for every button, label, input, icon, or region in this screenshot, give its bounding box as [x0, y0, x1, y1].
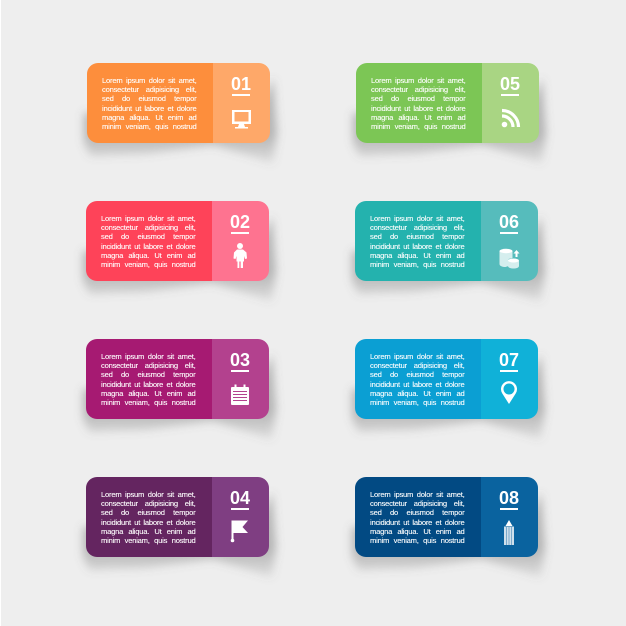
body text: consectetur adipisicing elit,: [101, 223, 196, 232]
body text: consectetur adipisicing elit,: [101, 361, 196, 370]
card 06 teal: [348, 201, 550, 300]
body text: incididunt ut labore et dolore: [370, 380, 464, 389]
card face: [355, 339, 538, 419]
card face: [86, 339, 269, 419]
body text: Lorem ipsum dolor sit amet,: [102, 76, 196, 84]
body text: Lorem ipsum dolor sit amet,: [101, 352, 196, 360]
card 05 green: [348, 63, 550, 162]
card 04 purple: [78, 477, 280, 576]
body text: magna aliqua. Ut enim ad: [101, 251, 196, 260]
body text: sed do eiusmod tempor: [101, 232, 196, 241]
body text: minim veniam, quis nostrud: [101, 398, 196, 407]
icon: map pin: [501, 381, 517, 404]
shadow: [78, 356, 280, 438]
number: 08: [499, 488, 519, 508]
body text: minim veniam, quis nostrud: [370, 536, 464, 545]
body text: Lorem ipsum dolor sit amet,: [370, 490, 464, 498]
icon: person: [234, 243, 247, 268]
body text: sed do eiusmod tempor: [370, 508, 464, 517]
body text: [370, 490, 465, 545]
body text: consectetur adipisicing elit,: [101, 499, 196, 508]
body text: sed do eiusmod tempor: [370, 232, 464, 241]
body text: Lorem ipsum dolor sit amet,: [371, 76, 466, 84]
body text: consectetur adipisicing elit,: [102, 85, 196, 94]
body text: magna aliqua. Ut enim ad: [101, 389, 196, 398]
body text: magna aliqua. Ut enim ad: [371, 113, 466, 122]
body text: minim veniam, quis nostrud: [370, 260, 464, 269]
body text: magna aliqua. Ut enim ad: [370, 389, 464, 398]
body text: [371, 76, 466, 131]
shadow: [348, 218, 550, 300]
shadow: [80, 80, 282, 162]
body text: consectetur adipisicing elit,: [370, 499, 464, 508]
body text: Lorem ipsum dolor sit amet,: [101, 490, 196, 498]
body text: incididunt ut labore et dolore: [371, 104, 466, 113]
body text: magna aliqua. Ut enim ad: [370, 251, 464, 260]
body text: minim veniam, quis nostrud: [101, 260, 196, 269]
body text: Lorem ipsum dolor sit amet,: [101, 214, 196, 222]
number: 03: [230, 350, 250, 370]
shadow: [78, 494, 280, 576]
card face: [355, 477, 538, 557]
icon: flag: [230, 520, 248, 542]
body text: incididunt ut labore et dolore: [370, 518, 464, 527]
number: 05: [500, 74, 520, 94]
card 01 orange: [80, 63, 282, 162]
shadow: [348, 356, 550, 438]
body text: incididunt ut labore et dolore: [101, 242, 196, 251]
shadow: [348, 494, 550, 576]
body text: magna aliqua. Ut enim ad: [370, 527, 464, 536]
body text: Lorem ipsum dolor sit amet,: [370, 352, 464, 360]
body text: sed do eiusmod tempor: [370, 370, 464, 379]
card 08 navy: [348, 477, 550, 576]
number: 01: [231, 74, 251, 94]
card face: [355, 201, 538, 281]
icon: pencil: [504, 520, 514, 545]
body text: minim veniam, quis nostrud: [370, 398, 464, 407]
shadow: [78, 218, 280, 300]
body text: incididunt ut labore et dolore: [101, 380, 196, 389]
card face: [86, 477, 269, 557]
body text: incididunt ut labore et dolore: [370, 242, 464, 251]
card face: [356, 63, 539, 143]
body text: sed do eiusmod tempor: [371, 94, 466, 103]
body text: incididunt ut labore et dolore: [102, 104, 196, 113]
body text: minim veniam, quis nostrud: [101, 536, 196, 545]
number: 06: [499, 212, 519, 232]
body text: sed do eiusmod tempor: [102, 94, 196, 103]
number: 07: [499, 350, 519, 370]
body text: sed do eiusmod tempor: [101, 370, 196, 379]
body text: consectetur adipisicing elit,: [370, 361, 464, 370]
body text: [370, 352, 465, 407]
body text: consectetur adipisicing elit,: [371, 85, 466, 94]
number: 04: [230, 488, 250, 508]
body text: [370, 214, 465, 269]
body text: minim veniam, quis nostrud: [102, 122, 196, 131]
body text: incididunt ut labore et dolore: [101, 518, 196, 527]
card face: [86, 201, 269, 281]
body text: sed do eiusmod tempor: [101, 508, 196, 517]
body text: Lorem ipsum dolor sit amet,: [370, 214, 464, 222]
icon: database: [500, 248, 520, 268]
card 03 magenta: [78, 339, 280, 438]
card 07 blue: [348, 339, 550, 438]
body text: [101, 214, 196, 269]
shadow: [348, 80, 550, 162]
body text: [101, 490, 196, 545]
body text: [101, 352, 196, 407]
body text: [102, 76, 197, 131]
body text: consectetur adipisicing elit,: [370, 223, 464, 232]
icon: monitor: [232, 110, 251, 128]
icon: notepad: [231, 384, 249, 405]
card face: [87, 63, 270, 143]
icon: rss: [502, 108, 520, 128]
body text: magna aliqua. Ut enim ad: [102, 113, 196, 122]
body text: minim veniam, quis nostrud: [371, 122, 466, 131]
number: 02: [230, 212, 250, 232]
body text: magna aliqua. Ut enim ad: [101, 527, 196, 536]
card 02 red: [78, 201, 280, 300]
